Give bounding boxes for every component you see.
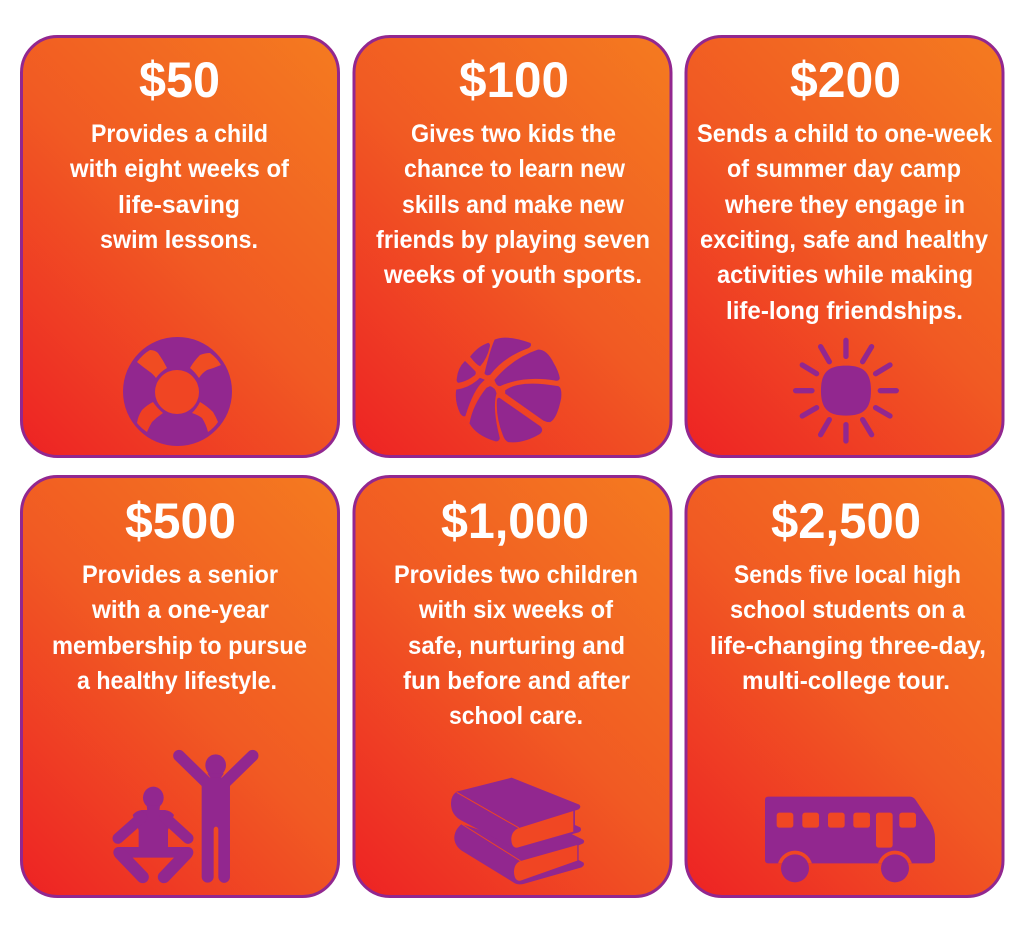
text block: $50 description: swim lessons.: [100, 226, 258, 254]
text block: $200 description: activities while making: [717, 261, 973, 289]
text block: $100 description: chance to learn new: [404, 155, 626, 183]
text block: $500 description: membership to pursue: [52, 632, 307, 660]
text block: $500 description: with a one-year: [91, 596, 269, 624]
heading: $50: $50: [139, 52, 220, 108]
icon: two people: [118, 754, 253, 883]
text block: $100 description: [376, 120, 650, 289]
heading: $2,500: $2,500: [771, 493, 921, 549]
panel: $50 swim lessons: [22, 36, 338, 456]
text block: $50 description: life-saving: [118, 191, 240, 219]
icon: life ring: [123, 337, 232, 446]
text block: $2,500 description: [710, 561, 986, 695]
text block: $100 description: Gives two kids the: [411, 120, 616, 148]
text block: $200 description: life-long friendships.: [726, 297, 963, 325]
icon: bus: [765, 797, 935, 886]
text block: $2,500 description: life-changing three-day,: [710, 632, 986, 660]
text block: $200 description: exciting, safe and healthy: [700, 226, 988, 254]
text block: $1,000 description: safe, nurturing and: [408, 632, 625, 660]
text block: $1,000 description: school care.: [449, 702, 583, 730]
icon: sun: [796, 340, 896, 441]
text block: $1,000 description: [394, 561, 638, 730]
text block: $2,500 description: Sends five local high: [734, 561, 961, 589]
heading: $500: $500: [125, 493, 236, 549]
text block: $100 description: friends by playing seven: [376, 226, 650, 254]
panel: $200 summer day camp: [686, 36, 1003, 456]
text block: $50 description: Provides a child: [91, 120, 268, 148]
text block: $50 description: [69, 120, 290, 254]
text block: $100 description: skills and make new: [402, 191, 624, 219]
text block: $1,000 description: fun before and after: [403, 667, 630, 695]
text block: $200 description: Sends a child to one-week: [697, 120, 992, 148]
panel: $500 senior membership: [22, 476, 338, 896]
text block: $1,000 description: Provides two children: [394, 561, 638, 589]
panel: $100 youth sports: [354, 36, 671, 456]
text block: $1,000 description: with six weeks of: [418, 596, 614, 624]
text block: $200 description: of summer day camp: [727, 155, 961, 183]
panel: $1,000 child care: [354, 476, 671, 896]
text block: $2,500 description: school students on a: [730, 596, 966, 624]
text block: $100 description: weeks of youth sports.: [383, 261, 642, 289]
icon: stacked books: [451, 778, 584, 884]
panel: $2,500 college tour: [686, 476, 1003, 896]
text block: $200 description: [697, 120, 992, 325]
text block: $500 description: [52, 561, 307, 695]
text block: $2,500 description: multi-college tour.: [742, 667, 950, 695]
text block: $500 description: a healthy lifestyle.: [77, 667, 277, 695]
heading: $1,000: $1,000: [441, 493, 589, 549]
text block: $500 description: Provides a senior: [82, 561, 278, 589]
heading: $200: $200: [790, 52, 901, 108]
icon: basketball: [456, 338, 561, 442]
text block: $50 description: with eight weeks of: [69, 155, 290, 183]
text block: $200 description: where they engage in: [724, 191, 965, 219]
heading: $100: $100: [459, 52, 569, 108]
